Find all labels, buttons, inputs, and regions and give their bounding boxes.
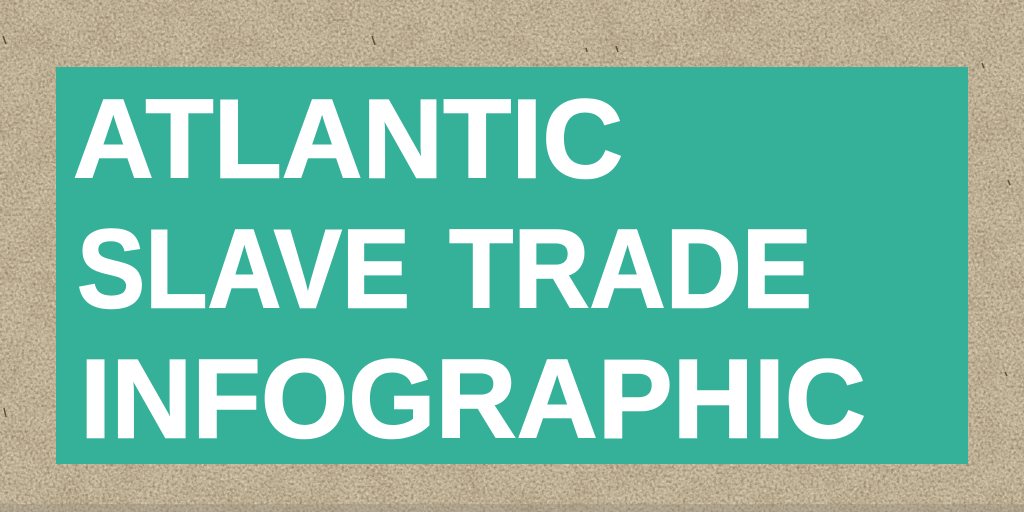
title (73, 76, 866, 462)
title: ATLANTIC (73, 76, 623, 202)
title: INFOGRAPHIC (80, 336, 866, 462)
title: TRADE (449, 206, 812, 332)
panel: title block (56, 67, 968, 464)
title: SLAVE (77, 206, 410, 332)
